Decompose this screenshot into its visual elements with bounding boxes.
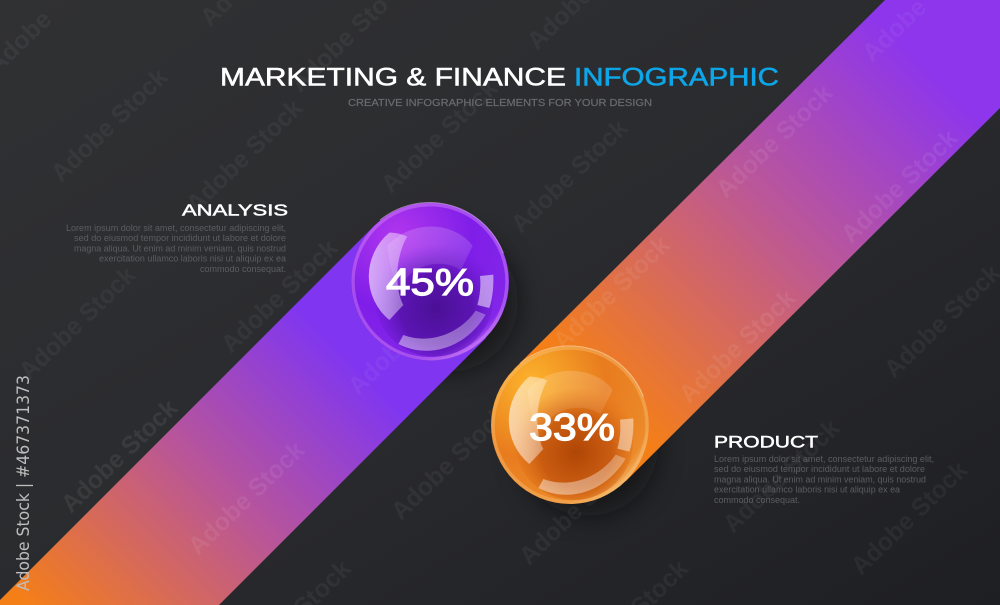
band: upper-right diagonal	[514, 0, 1000, 481]
sphere shadows	[378, 232, 658, 516]
glass highlight: right arc	[617, 418, 633, 452]
sphere: 45%	[351, 203, 509, 361]
band: lower-left diagonal	[0, 226, 486, 605]
glass highlight: top lens	[527, 371, 613, 434]
subtitle: CREATIVE INFOGRAPHIC ELEMENTS FOR YOUR DESIGN	[348, 98, 652, 109]
stock watermarks: Adobe Stock	[376, 74, 503, 198]
text block: analysis: exercitation ullamco laboris nisi ut aliquip ex ea	[99, 254, 286, 264]
stock watermarks: Adobe Stock	[46, 63, 173, 187]
stock watermarks: Adobe Stock	[548, 231, 675, 355]
text block: product: Lorem ipsum dolor sit amet, consectetur adipiscing elit,	[714, 454, 934, 464]
text block: analysis: magna aliqua. Ut enim ad minim veniam, quis nostrud	[74, 244, 286, 254]
title: MARKETING & FINANCE	[220, 64, 566, 92]
glass highlight: bottom arc	[398, 311, 486, 351]
stock watermarks over bands: Adobe Stock	[56, 394, 183, 518]
value: 45%: 45%	[386, 262, 474, 304]
text block: product: commodo consequat.	[714, 495, 800, 505]
text block: analysis: sed do eiusmod tempor incididunt ut labore et dolore	[74, 233, 286, 243]
glass highlight: right arc	[477, 275, 493, 308]
text block: analysis: commodo consequat.	[200, 264, 286, 274]
stock watermarks: Adobe Stock	[183, 436, 310, 560]
text block: product	[714, 454, 934, 505]
title	[220, 64, 779, 92]
heading: product: PRODUCT	[714, 432, 818, 452]
stock watermarks: Adobe Stock	[718, 414, 845, 538]
stock id label: Adobe Stock | #467371373	[14, 375, 34, 591]
text block: product: exercitation ullamco laboris nisi ut aliquip ex ea	[714, 484, 900, 494]
stock watermarks: Adobe Stock	[386, 401, 513, 525]
value: 33%: 33%	[529, 407, 615, 449]
stock watermarks: Adobe Stock	[181, 94, 308, 218]
stock watermarks: Adobe Stock	[836, 124, 963, 248]
stock watermarks: Adobe Stock	[846, 456, 973, 580]
sphere: 33%	[491, 346, 649, 504]
glass highlight: left arc	[369, 233, 407, 320]
stock watermarks: Adobe Stock	[506, 114, 633, 238]
stock watermarks: Adobe Stock	[56, 394, 183, 518]
glass highlight: bottom arc	[538, 455, 626, 495]
text block: product: magna aliqua. Ut enim ad minim veniam, quis nostrud	[714, 474, 926, 484]
heading: analysis: ANALYSIS	[182, 203, 288, 220]
stock watermarks: Adobe Stock	[514, 446, 641, 570]
title: INFOGRAPHIC	[574, 64, 779, 92]
stock watermarks over bands	[56, 79, 963, 560]
stock watermarks over bands: Adobe Stock	[836, 124, 963, 248]
glass highlight: top lens	[387, 227, 473, 290]
stock watermarks over bands: Adobe Stock	[674, 284, 801, 408]
stock watermarks over bands: Adobe Stock	[711, 79, 838, 203]
stock watermarks over bands: Adobe Stock	[183, 436, 310, 560]
text block: product: sed do eiusmod tempor incididunt ut labore et dolore	[714, 464, 925, 474]
text block: analysis	[66, 223, 286, 274]
stock watermarks over bands: Adobe Stock	[548, 231, 675, 355]
glass highlight: left arc	[509, 377, 547, 464]
text block: analysis: Lorem ipsum dolor sit amet, consectetur adipiscing elit,	[66, 223, 286, 233]
stock watermarks: Adobe Stock	[711, 79, 838, 203]
stock watermarks: Adobe Stock	[14, 261, 141, 385]
stock watermarks: Adobe Stock	[674, 284, 801, 408]
stock watermarks: Adobe Stock	[216, 234, 343, 358]
stock watermarks: Adobe Stock	[343, 276, 470, 400]
